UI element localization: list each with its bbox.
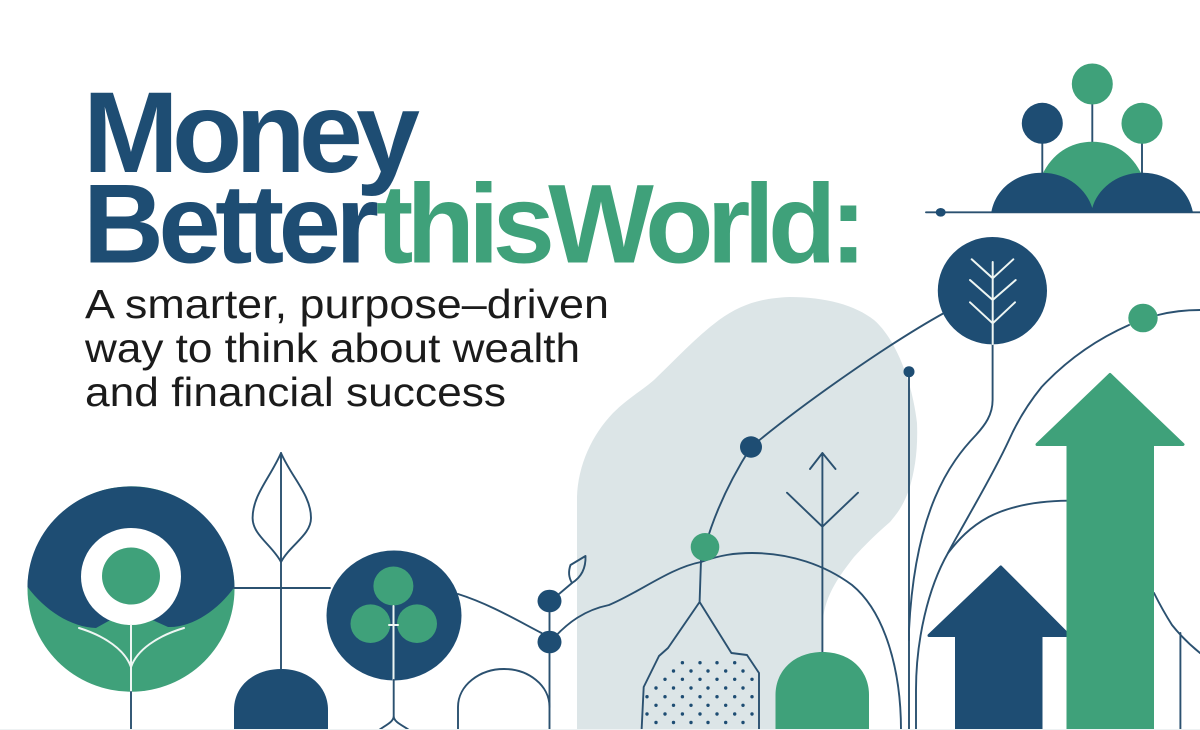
subtitle line 2: way to think about wealth — [84, 325, 580, 371]
stem under large circle — [130, 692, 132, 730]
curve: clover circle to central node — [458, 594, 542, 633]
title line 2: this World: thisWorld: — [376, 162, 867, 286]
arrow: green up arrow — [1037, 374, 1183, 730]
node: top right green — [1128, 304, 1158, 332]
stem with fork under clover circle — [379, 680, 409, 730]
navy dome — [234, 669, 328, 730]
icon: clover tree circle — [326, 550, 462, 680]
icon: top right hills with three trees — [926, 64, 1200, 217]
curve: line at right of green arrow — [1154, 593, 1200, 730]
icon: dotted house shape — [642, 560, 759, 730]
background blob — [577, 297, 917, 730]
icon: large circle flower — [28, 486, 234, 692]
vertical line with small dot — [904, 366, 914, 730]
icon: arrow tree over green dome — [776, 453, 869, 730]
title — [83, 69, 867, 286]
curve: connecting line through nodes to leaf circle — [705, 313, 944, 547]
icon: outlined leaf with stem — [253, 453, 311, 670]
curve: branch into green arrow — [948, 501, 1068, 553]
title line 1: Money — [83, 69, 420, 197]
curve: long line to top right green node — [916, 310, 1200, 730]
arrow: navy up arrow — [929, 567, 1069, 730]
subtitle — [84, 281, 609, 415]
curve: long wave from central node to tall arch — [552, 553, 901, 730]
node: navy on curve — [740, 436, 762, 458]
subtitle line 1: A smarter, purpose–driven — [85, 281, 609, 327]
connector: horizontal line between circles — [234, 587, 330, 589]
node: green on curve — [691, 533, 719, 561]
outlined arch — [458, 669, 550, 730]
bottom edge — [0, 729, 1200, 730]
subtitle line 3: and financial success — [85, 369, 506, 415]
icon: leaf tree circle — [938, 237, 1047, 344]
curve: stem from leaf circle flowing down — [909, 343, 993, 640]
central nodes with sprig — [538, 556, 586, 730]
title line 2: Better: Better — [83, 162, 379, 286]
